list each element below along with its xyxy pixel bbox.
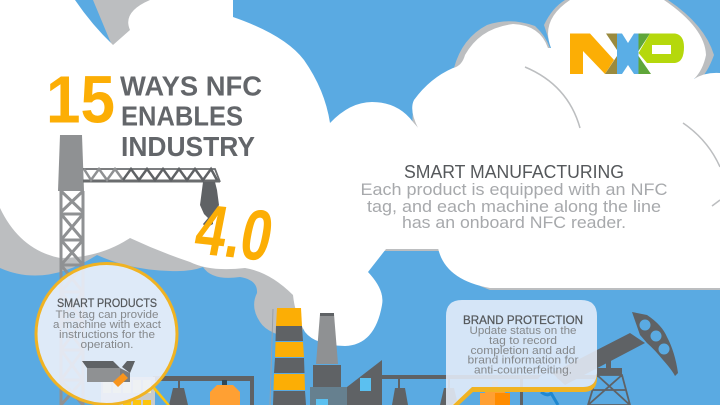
title: ways NFC enables industry: WAYS NFC: [120, 70, 262, 102]
text: brand protection body: anti-counterfeiting.: [474, 364, 572, 376]
yellow machine: [101, 377, 170, 405]
title: 15: 15: [46, 62, 115, 138]
orange tank right: [480, 381, 510, 405]
text: smart manufacturing body: [360, 180, 668, 232]
panel: smart products: [36, 264, 177, 404]
text: smart manufacturing body: tag, and each machine along the line: [367, 197, 661, 216]
crane claw: [200, 182, 219, 228]
text: brand protection body: tag to record: [489, 335, 557, 347]
text: brand protection body: brand information for: [468, 354, 579, 366]
text: brand protection body: Update status on the: [470, 325, 576, 337]
panel: brand protection: [446, 300, 597, 405]
heading: brand protection: BRAND PROTECTION: [463, 313, 583, 327]
title: ways NFC enables industry: [120, 70, 262, 162]
text: smart products body: operation.: [80, 339, 134, 351]
crane tower lattice: [61, 191, 83, 405]
orange tank left: [210, 385, 240, 405]
factory building: [347, 360, 382, 405]
thin cloud contour lines: [525, 67, 720, 206]
text: smart products body: [53, 309, 161, 351]
pumpjack: [552, 312, 678, 405]
conveyor pipes: [152, 375, 597, 405]
crane chimney: [58, 135, 84, 191]
text: brand protection body: completion and add: [470, 345, 576, 357]
factory: striped chimney: [270, 308, 306, 405]
title: ways NFC enables industry: ENABLES: [121, 100, 243, 132]
factory: gray chimney: [310, 313, 347, 405]
text: smart products body: The tag can provide: [56, 309, 158, 321]
text: smart products body: instructions for the: [59, 329, 155, 341]
title: ways NFC enables industry: INDUSTRY: [121, 131, 255, 162]
blue pipe: [537, 373, 559, 405]
conveyor machines: [169, 379, 458, 405]
text: smart manufacturing body: Each product is equipped with an NFC: [360, 180, 668, 199]
text: brand protection body: [468, 325, 579, 376]
heading: smart manufacturing: SMART MANUFACTURING: [404, 162, 624, 182]
icon: box with tag: [82, 361, 135, 387]
crane jib: [83, 169, 220, 182]
heading: smart products: SMART PRODUCTS: [57, 296, 157, 310]
text: smart products body: a machine with exact: [53, 319, 161, 331]
title: 4.0: 4.0: [189, 189, 280, 276]
logo: NXP: [570, 34, 684, 74]
text: smart manufacturing body: has an onboard NFC reader.: [402, 213, 626, 232]
